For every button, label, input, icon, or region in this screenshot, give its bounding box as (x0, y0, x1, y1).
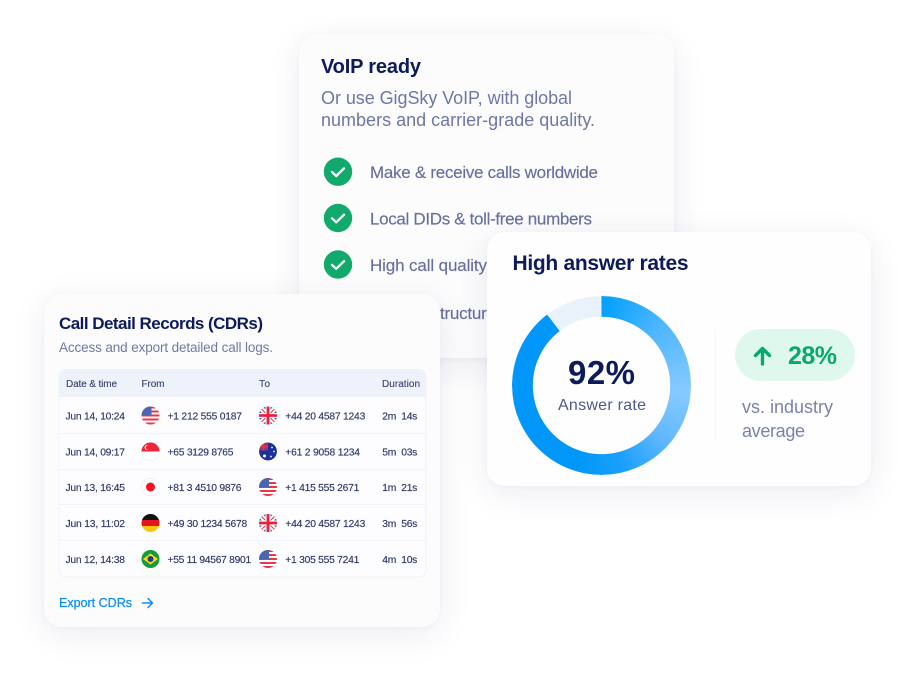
row 2: +61 2 9058 1234 (285, 448, 360, 458)
row 5: +55 11 94567 8901 (168, 555, 251, 566)
table header: To (259, 379, 270, 390)
row 3: +1 415 555 2671 (285, 483, 360, 494)
row 4 (66, 514, 417, 532)
list item: call quality (324, 250, 488, 279)
list item: call quality: High call quality (370, 256, 488, 275)
row 2: 5m 03s (382, 448, 417, 458)
badge: up 28 percent: 28% (788, 342, 837, 370)
list item: local DIDs (324, 204, 592, 232)
row 3: Jun 13, 16:45 (66, 483, 125, 494)
text block: vs. industry average: average (742, 421, 805, 441)
flag: Japan (142, 478, 159, 496)
row 5: Jun 12, 14:38 (66, 555, 125, 566)
flag: Australia (259, 442, 277, 460)
text block: VoIP description: numbers and carrier-grade quality. (321, 110, 595, 130)
row 2: +65 3129 8765 (168, 448, 234, 458)
row 5: +1 305 555 7241 (285, 555, 360, 566)
text block: VoIP description: Or use GigSky VoIP, with global (321, 88, 572, 108)
badge: up 28 percent (735, 329, 855, 381)
panel: VoIP ready (299, 34, 674, 358)
link: Export CDRs: Export CDRs (59, 596, 132, 610)
table header: Duration (382, 379, 420, 390)
row 1 (66, 406, 417, 424)
panel: Call Detail Records (44, 294, 440, 627)
row 1: +44 20 4587 1243 (285, 412, 366, 422)
flag: Singapore (142, 442, 160, 460)
donut centre value: 92% (568, 354, 635, 391)
table: call logs (59, 370, 426, 577)
row 4: +49 30 1234 5678 (168, 519, 247, 530)
row 3: +81 3 4510 9876 (168, 483, 242, 494)
row 4: Jun 13, 11:02 (66, 519, 125, 530)
table header: Date & time (66, 379, 117, 390)
heading: Call Detail Records: Call Detail Records (CDRs) (59, 314, 263, 333)
row 5: 4m 10s (382, 555, 417, 566)
row 1: Jun 14, 10:24 (66, 412, 125, 422)
row 2: Jun 14, 09:17 (66, 448, 125, 458)
list item: local DIDs: Local DIDs & toll-free numbers (370, 210, 592, 228)
list item: calls worldwide (324, 158, 598, 186)
donut centre label: Answer rate (558, 397, 646, 414)
text block: CDR subtitle: Access and export detailed call logs. (59, 340, 273, 355)
list item: partially hidden infrastructure line: tructure (440, 304, 496, 323)
flag: Germany (142, 514, 160, 532)
panel: High answer rates (487, 232, 871, 486)
row 3 (66, 478, 417, 496)
row 5 (66, 550, 417, 568)
row 1: 2m 14s (382, 412, 417, 422)
list item: calls worldwide: Make & receive calls worldwide (370, 163, 598, 182)
text block: VoIP description (321, 88, 595, 130)
divider (715, 330, 716, 442)
row 4: 3m 56s (382, 519, 417, 530)
heading: VoIP ready: VoIP ready (321, 56, 422, 78)
table header (59, 370, 426, 397)
donut chart: 92 percent (512, 296, 691, 474)
heading: High answer rates: High answer rates (512, 252, 688, 275)
table header: From (142, 379, 164, 390)
row 1: +1 212 555 0187 (168, 412, 242, 422)
row 2 (66, 442, 417, 460)
flag: Brazil (142, 550, 160, 568)
row 4: +44 20 4587 1243 (285, 519, 366, 530)
row 3: 1m 21s (382, 483, 417, 494)
text block: vs. industry average (742, 397, 833, 441)
text block: vs. industry average: vs. industry (742, 397, 833, 417)
